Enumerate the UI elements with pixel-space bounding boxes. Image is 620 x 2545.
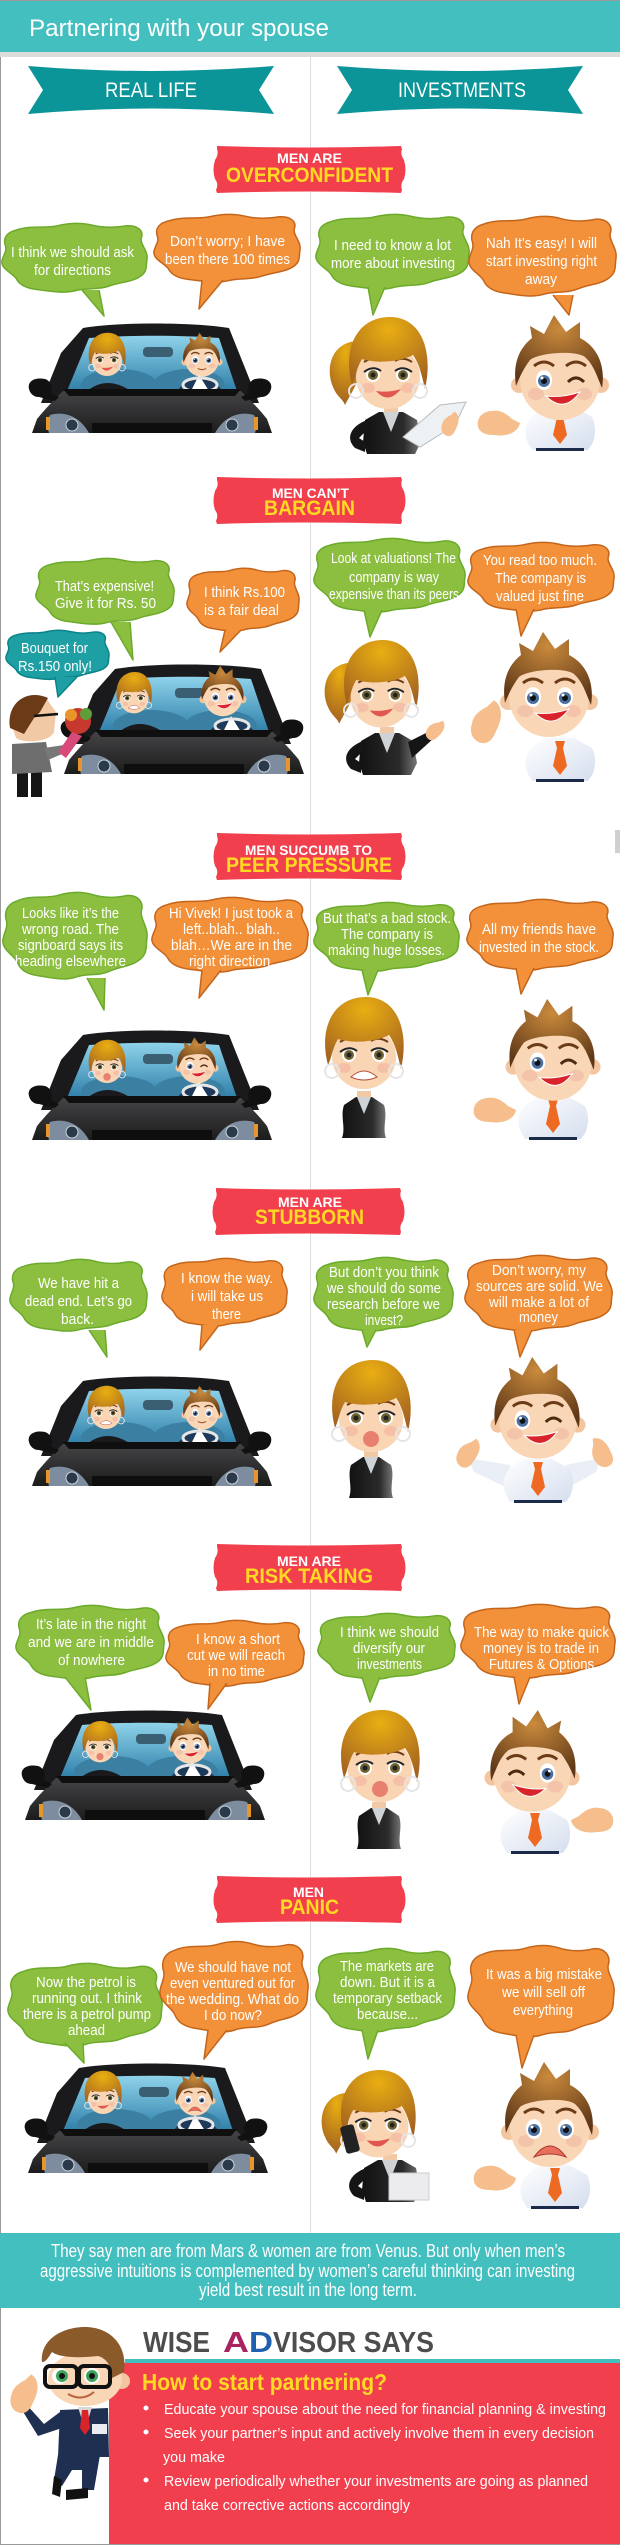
bubble: markets down: temporary setback (333, 1990, 442, 2007)
bubble: ask for directions: for directions (34, 262, 111, 279)
bubble: bad stock: making huge losses. (328, 942, 445, 959)
bubble: read too much: valued just fine (496, 588, 584, 605)
ribbon heading: men are overconfident (214, 146, 406, 193)
advisor character (6, 2327, 130, 2500)
bubble: diversify (318, 1613, 455, 1702)
panel: overconfident (2, 146, 616, 454)
ribbon heading: men succumb to peer pressure: MEN SUCCUMB TO (245, 842, 372, 858)
bubble: it's easy: away (525, 271, 557, 288)
advice list: Seek your partner’s input and actively involve them in every decision (164, 2425, 594, 2442)
bubble: dead end: back. (61, 1311, 94, 1328)
bubble: it's easy: start investing right (486, 253, 598, 270)
bubble: wrong road: signboard says its (18, 937, 123, 954)
ribbon heading: men can't bargain: MEN CAN’T (272, 485, 349, 501)
bubble: friends invested: All my friends have (482, 921, 596, 938)
bubble: solid sources (465, 1255, 612, 1357)
bubble: read too much: The company is (495, 570, 586, 587)
man winking (478, 315, 609, 451)
bubble: big mistake: everything (513, 2002, 573, 2019)
man ok gesture (466, 632, 598, 782)
conclusion band (0, 2233, 620, 2308)
advice list (144, 2401, 606, 2514)
bubble: diversify: diversify our (353, 1640, 425, 1657)
bubble: solid sources: will make a lot of (488, 1294, 590, 1311)
bubble: hi vivek (152, 897, 308, 998)
banner: investments: INVESTMENTS (398, 79, 526, 102)
bubble: hi vivek: left..blah.. blah.. (183, 921, 280, 938)
bubble: markets down (316, 1948, 455, 2059)
bubble: need to know: more about investing (331, 255, 455, 272)
bubble: friends invested (467, 899, 613, 994)
bubble: diversify: investments (357, 1656, 422, 1673)
bubble: wedding: even ventured out for (170, 1975, 295, 1992)
bubble: solid sources: Don’t worry, my (492, 1262, 586, 1279)
woman worried (325, 997, 404, 1138)
bubble: bad stock: But that’s a bad stock. (323, 910, 451, 927)
bubble: research (314, 1257, 453, 1347)
wise advisor heading (143, 2327, 434, 2359)
bubble: research: But don’t you think (329, 1264, 439, 1281)
bubble: petrol running out: running out. I think (32, 1990, 142, 2007)
bubble: wedding (160, 1941, 308, 2059)
bubble: need to know (316, 214, 469, 315)
bubble: bad stock: The company is (341, 926, 433, 943)
car with couple (29, 1376, 272, 1486)
bubble: it's easy: Nah It’s easy! I will (486, 235, 597, 252)
bubble: don't worry: Don’t worry; I have (170, 233, 285, 250)
bubble: petrol running out (8, 1963, 162, 2063)
car with couple (29, 324, 272, 433)
bubble: bouquet (6, 630, 109, 697)
bubble: wrong road: heading elsewhere (15, 953, 126, 970)
bubble: expensive: Give it for Rs. 50 (55, 595, 156, 612)
ribbon heading: men are overconfident: MEN ARE (277, 150, 342, 166)
bubble: read too much: You read too much. (483, 552, 597, 569)
bubble: hi vivek: blah…We are in the (171, 937, 292, 954)
woman questioning (332, 1360, 411, 1498)
bubble: dead end: dead end. Let’s go (25, 1293, 132, 1310)
bubble: expensive: That’s expensive! (55, 578, 154, 595)
advice list: Review periodically whether your investments are going as planned (164, 2473, 588, 2490)
ribbon heading: men succumb to peer pressure: PEER PRESSURE (226, 854, 392, 877)
woman with tablet (330, 317, 466, 454)
bubble: research: we should do some (326, 1280, 441, 1297)
bubble: wedding: I do now? (204, 2007, 262, 2024)
bubble: know the way: there (212, 1306, 241, 1323)
bubble: valuations: company is way (349, 569, 439, 586)
bubble: fair deal: I think Rs.100 (204, 584, 285, 601)
advice heading: How to start partnering? (142, 2369, 387, 2395)
bubble: dead end (10, 1259, 147, 1357)
advice list: you make (163, 2449, 225, 2466)
banner: investments (337, 66, 583, 114)
bubble: valuations (314, 538, 465, 637)
bubble: diversify: I think we should (340, 1624, 439, 1641)
bubble: it's easy (469, 216, 616, 315)
bubble: solid sources: money (519, 1309, 558, 1326)
ribbon heading: men are overconfident: OVERCONFIDENT (226, 164, 393, 187)
bubble: quick money (461, 1604, 615, 1704)
bubble: know the way: i will take us (191, 1288, 263, 1305)
man winking (484, 1710, 613, 1854)
bubble: don't worry (154, 214, 300, 309)
ribbon heading: men are risk taking: RISK TAKING (245, 1565, 373, 1588)
bubble: hi vivek: right direction. (189, 953, 274, 970)
wise advisor heading: A (223, 2327, 249, 2359)
ribbon heading: men are stubborn: MEN ARE (278, 1194, 342, 1210)
bubble: markets down: because... (357, 2006, 418, 2023)
bubble: wrong road (3, 892, 147, 1010)
bubble: ask for directions: I think we should ask (11, 244, 134, 261)
conclusion band: yield best result in the long term. (199, 2280, 417, 2300)
ribbon heading: men are stubborn: STUBBORN (255, 1206, 364, 1229)
ribbon heading: men panic: MEN (293, 1884, 324, 1900)
header bar (0, 0, 620, 57)
ribbon heading: men panic: PANIC (280, 1896, 339, 1919)
bubble: fair deal: is a fair deal (204, 602, 279, 619)
bubble: petrol running out: Now the petrol is (36, 1974, 136, 1991)
ribbon heading: men can't bargain (214, 477, 406, 524)
title: Partnering with your spouse (29, 15, 329, 42)
advice list: and take corrective actions accordingly (164, 2497, 410, 2514)
bubble: big mistake: we will sell off (501, 1984, 586, 2001)
man shrugging (452, 1357, 617, 1503)
man panicking (474, 2062, 599, 2209)
panel: stubborn (10, 1188, 617, 1503)
woman concerned (341, 1710, 420, 1849)
bubble: don't worry: been there 100 times (165, 251, 290, 268)
ribbon heading: men are risk taking: MEN ARE (277, 1553, 341, 1569)
bubble: short cut: in no time (208, 1663, 265, 1680)
bubble: short cut (166, 1620, 304, 1709)
bubble: research: research before we (327, 1296, 440, 1313)
bubble: hi vivek: Hi Vivek! I just took a (169, 905, 294, 922)
panel: peer pressure (3, 833, 613, 1140)
flower seller (9, 695, 92, 797)
bubble: know the way: I know the way. (181, 1270, 273, 1287)
ribbon heading: men are stubborn (212, 1188, 404, 1235)
bubble: big mistake (468, 1945, 614, 2068)
advice list: Educate your spouse about the need for financial planning & investing (164, 2401, 606, 2418)
wise advisor heading: D (249, 2327, 273, 2359)
wise advisor heading: VISOR SAYS (273, 2327, 434, 2359)
bubble: valuations: expensive than its peers (329, 586, 459, 603)
bubble: late at night: and we are in middle (28, 1634, 154, 1651)
ribbon heading: men are risk taking (214, 1544, 406, 1591)
wise advisor heading: WISE (143, 2327, 210, 2359)
bubble: fair deal (187, 568, 299, 652)
bubble: wrong road: wrong road. The (21, 921, 119, 938)
bubble: research: invest? (365, 1312, 403, 1329)
bubble: friends invested: invested in the stock. (479, 939, 599, 956)
bubble: valuations: Look at valuations! The (331, 550, 456, 567)
ribbon heading: men succumb to peer pressure (214, 833, 406, 880)
bubble: bad stock (314, 902, 459, 995)
bubble: bouquet: Rs.150 only! (18, 658, 92, 675)
car with couple (61, 664, 304, 774)
panel: can't bargain (6, 477, 614, 797)
bubble: solid sources: sources are solid. We (476, 1278, 603, 1295)
bubble: late at night (16, 1605, 164, 1710)
bubble: quick money: Futures & Options (489, 1656, 594, 1673)
bubble: dead end: We have hit a (38, 1275, 120, 1292)
bubble: quick money: money is to trade in (483, 1640, 599, 1657)
bubble: petrol running out: ahead (68, 2022, 105, 2039)
bubble: late at night: of nowhere (58, 1652, 125, 1669)
bubble: wedding: the wedding. What do (166, 1991, 299, 2008)
panel: panic (8, 1876, 614, 2209)
woman pointing (325, 640, 448, 775)
banner: real life (28, 66, 274, 114)
bubble: know the way (162, 1258, 287, 1350)
car with couple (29, 1030, 272, 1140)
bubble: wrong road: Looks like it’s the (22, 905, 119, 922)
bubble: ask for directions (2, 223, 147, 316)
advice panel (109, 2359, 620, 2544)
banner: real life: REAL LIFE (105, 79, 197, 102)
ribbon heading: men panic (214, 1876, 406, 1923)
ribbon heading: men can't bargain: BARGAIN (264, 497, 355, 520)
bubble: markets down: down. But it is a (340, 1974, 436, 1991)
car with couple (25, 2064, 268, 2173)
bubble: read too much (468, 542, 614, 636)
bubble: markets down: The markets are (340, 1958, 434, 1975)
bubble: short cut: cut we will reach (187, 1647, 285, 1664)
man winking (474, 999, 601, 1140)
bubble: petrol running out: there is a petrol pump (23, 2006, 151, 2023)
bubble: short cut: I know a short (196, 1631, 281, 1648)
bubble: bouquet: Bouquet for (21, 640, 88, 657)
panel: risk taking (16, 1544, 615, 1854)
car with couple (22, 1710, 265, 1820)
bubble: need to know: I need to know a lot (334, 237, 452, 254)
bubble: late at night: It’s late in the night (36, 1616, 147, 1633)
bubble: expensive (36, 558, 174, 660)
bubble: big mistake: It was a big mistake (486, 1966, 602, 1983)
woman on phone with laptop (322, 2070, 429, 2202)
bubble: wedding: We should have not (175, 1959, 292, 1976)
